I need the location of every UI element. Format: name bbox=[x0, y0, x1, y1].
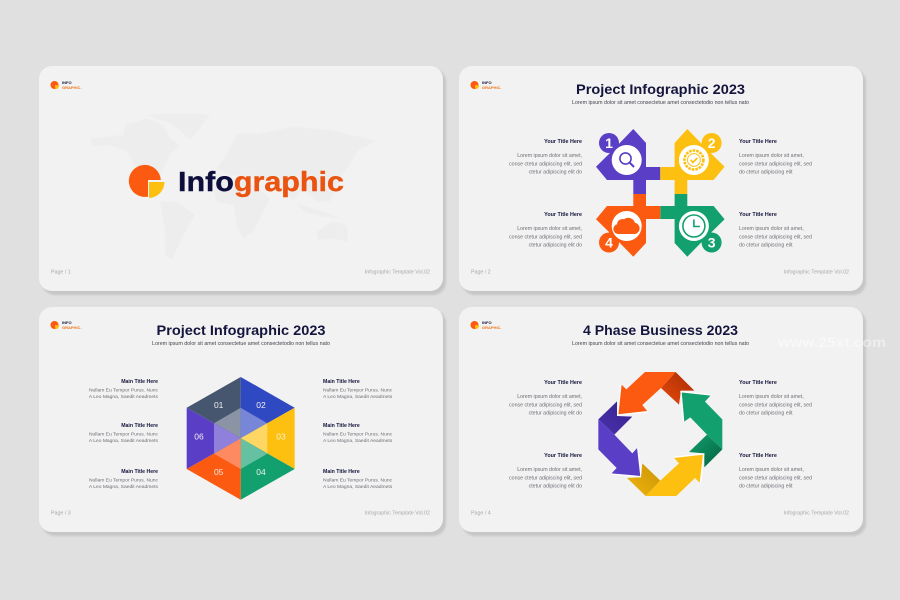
small logo: INFO bbox=[62, 80, 72, 85]
small logo: GRAPHIC. bbox=[482, 85, 502, 90]
text block: top left: conse ctetur adipiscing elit, sed bbox=[509, 402, 582, 408]
text block: left 2 bbox=[89, 423, 159, 444]
text block: bottom right: do ctetur adipiscing elit bbox=[739, 484, 793, 490]
text block: bottom left bbox=[509, 453, 582, 490]
arrow 3: green: 3 bbox=[708, 234, 716, 250]
subtitle: Lorem ipsum dolor sit amet consectetue amet consectetodio non tellus nato bbox=[572, 341, 749, 347]
text block: bottom left: ctetur adipiscing elit do bbox=[529, 242, 582, 248]
text block: bottom right: Lorem ipsum dolor sit amet, bbox=[739, 467, 804, 473]
footer page: Page / 3 bbox=[51, 510, 71, 516]
text block: right 1: Nullam Eu Tempor Purus. Nunc bbox=[323, 388, 393, 394]
segment 06: 06 bbox=[194, 432, 204, 442]
text block: left 1: A Leo Magna, Saedit Aeadmets bbox=[89, 394, 159, 400]
text block: bottom right: conse ctetur adipiscing elit, sed bbox=[739, 476, 812, 482]
text block: bottom right: Your Title Here bbox=[739, 453, 777, 459]
arrow 4: orange: 4 bbox=[605, 234, 613, 250]
arrow 4: orange bbox=[596, 194, 660, 257]
text block: top right: do ctetur adipiscing elit bbox=[739, 410, 793, 416]
text block: right 2 bbox=[323, 423, 393, 444]
text block: top right: Your Title Here bbox=[739, 139, 777, 145]
text block: right 2: A Leo Magna, Saedit Aeadmets bbox=[323, 438, 393, 444]
text block: bottom left: Your Title Here bbox=[544, 453, 582, 459]
arrow 1: purple bbox=[596, 129, 660, 194]
segment 05: 05 bbox=[214, 467, 224, 477]
footer template: Infographic Template Vol.02 bbox=[784, 510, 849, 516]
small logo bbox=[470, 80, 502, 90]
arrow: green bbox=[681, 392, 722, 467]
text block: left 3: A Leo Magna, Saedit Aeadmets bbox=[89, 484, 159, 490]
segment 04: 04 bbox=[256, 467, 266, 477]
text block: bottom left bbox=[509, 212, 582, 248]
icon: cloud bbox=[613, 218, 640, 234]
text block: right 3: A Leo Magna, Saedit Aeadmets bbox=[323, 484, 393, 490]
arrow 1: purple: 1 bbox=[605, 135, 613, 151]
text block: right 3 bbox=[323, 469, 393, 490]
text block: top right: Lorem ipsum dolor sit amet, bbox=[739, 153, 804, 159]
text block: top left: ctetur adipiscing elit do bbox=[529, 410, 582, 416]
segment 03: 03 bbox=[276, 432, 286, 442]
text block: right 1: Main Title Here bbox=[323, 379, 360, 385]
text block: left 2: Main Title Here bbox=[121, 423, 158, 429]
small logo: GRAPHIC. bbox=[62, 325, 82, 330]
text block: top right: Your Title Here bbox=[739, 380, 777, 386]
text block: left 3 bbox=[89, 469, 159, 490]
text block: right 1: A Leo Magna, Saedit Aeadmets bbox=[323, 394, 393, 400]
text block: top left bbox=[509, 380, 582, 416]
text block: top right: conse ctetur adipiscing elit, sed bbox=[739, 162, 812, 168]
arrow 2: yellow: 2 bbox=[708, 135, 716, 151]
segment 02: 02 bbox=[256, 400, 266, 410]
text block: bottom right: Lorem ipsum dolor sit amet, bbox=[739, 226, 804, 232]
text block: bottom left: conse ctetur adipiscing elit, sed bbox=[509, 234, 582, 240]
title: Project Infographic 2023 bbox=[576, 82, 745, 97]
text block: top left: Your Title Here bbox=[544, 139, 582, 145]
icon: magnifier bbox=[620, 153, 634, 167]
text block: bottom left: conse ctetur adipiscing elit, sed bbox=[509, 476, 582, 482]
text block: bottom left: Lorem ipsum dolor sit amet, bbox=[517, 226, 582, 232]
text block: top right: do ctetur adipiscing elit bbox=[739, 170, 793, 176]
small logo bbox=[470, 320, 502, 330]
panel: 4 phase business bbox=[459, 307, 866, 536]
text block: bottom right: do ctetur adipiscing elit bbox=[739, 242, 793, 248]
icon: check badge bbox=[684, 150, 703, 170]
small logo: GRAPHIC. bbox=[482, 325, 502, 330]
cycle arrows bbox=[598, 372, 722, 496]
segment 01: 01 bbox=[214, 400, 224, 410]
text block: bottom right: conse ctetur adipiscing elit, sed bbox=[739, 234, 812, 240]
panel: cover slide bbox=[39, 66, 446, 295]
small logo bbox=[50, 320, 82, 330]
small logo: INFO bbox=[482, 320, 492, 325]
text block: bottom right: Your Title Here bbox=[739, 212, 777, 218]
main logo mark bbox=[129, 165, 164, 198]
footer template: Infographic Template Vol.02 bbox=[784, 270, 849, 276]
arrow: purple bbox=[598, 401, 641, 477]
subtitle: Lorem ipsum dolor sit amet consectetue amet consectetodio non tellus nato bbox=[152, 341, 330, 347]
text block: right 3: Main Title Here bbox=[323, 469, 360, 475]
title: 4 Phase Business 2023 bbox=[583, 323, 738, 338]
text block: top left: Your Title Here bbox=[544, 380, 582, 386]
small logo: GRAPHIC. bbox=[62, 85, 82, 90]
arrow 2: yellow bbox=[660, 129, 725, 194]
text block: left 2: Nullam Eu Tempor Purus. Nunc bbox=[89, 432, 159, 438]
text block: top right bbox=[739, 139, 812, 176]
arrow: orange bbox=[618, 372, 694, 415]
text block: right 1 bbox=[323, 379, 393, 400]
text block: left 1 bbox=[89, 379, 159, 400]
text block: bottom left: Your Title Here bbox=[544, 212, 582, 218]
small logo: INFO bbox=[62, 320, 72, 325]
main heading: Infographic bbox=[178, 166, 344, 197]
text block: top right bbox=[739, 380, 812, 416]
text block: top left: conse ctetur adipiscing elit, sed bbox=[509, 162, 582, 168]
text block: left 3: Main Title Here bbox=[121, 469, 158, 475]
small logo bbox=[50, 80, 82, 90]
text block: top left: Lorem ipsum dolor sit amet, bbox=[517, 153, 582, 159]
text block: top right: Lorem ipsum dolor sit amet, bbox=[739, 394, 804, 400]
text block: top right: conse ctetur adipiscing elit, sed bbox=[739, 402, 812, 408]
arrow: yellow bbox=[627, 454, 704, 496]
text block: right 2: Main Title Here bbox=[323, 423, 360, 429]
world map background bbox=[90, 113, 377, 260]
text block: left 2: A Leo Magna, Saedit Aeadmets bbox=[89, 438, 159, 444]
text block: bottom left: Lorem ipsum dolor sit amet, bbox=[517, 467, 582, 473]
icon: clock bbox=[683, 215, 705, 237]
title: Project Infographic 2023 bbox=[156, 323, 326, 338]
footer template: Infographic Template Vol.02 bbox=[365, 510, 430, 516]
arrow 3: green bbox=[660, 194, 725, 257]
text block: right 3: Nullam Eu Tempor Purus. Nunc bbox=[323, 478, 393, 484]
watermark: www.25xt.com bbox=[777, 334, 886, 350]
text block: bottom left: ctetur adipiscing elit do bbox=[529, 484, 582, 490]
text block: left 3: Nullam Eu Tempor Purus. Nunc bbox=[89, 478, 159, 484]
text block: top left: ctetur adipiscing elit do bbox=[529, 170, 582, 176]
panel: project infographic with arrows bbox=[459, 66, 866, 295]
footer page: Page / 4 bbox=[471, 510, 491, 516]
text block: top left bbox=[509, 139, 582, 176]
text block: left 1: Main Title Here bbox=[121, 379, 158, 385]
text block: right 2: Nullam Eu Tempor Purus. Nunc bbox=[323, 432, 393, 438]
text block: top left: Lorem ipsum dolor sit amet, bbox=[517, 394, 582, 400]
subtitle: Lorem ipsum dolor sit amet consectetue amet consectetodio non tellus nato bbox=[572, 100, 749, 106]
hexagon chart bbox=[187, 377, 295, 500]
text block: left 1: Nullam Eu Tempor Purus. Nunc bbox=[89, 388, 159, 394]
footer page: Page / 2 bbox=[471, 270, 491, 276]
footer page: Page / 1 bbox=[51, 270, 71, 276]
footer template: Infographic Template Vol.02 bbox=[365, 270, 430, 276]
text block: bottom right bbox=[739, 453, 812, 490]
text block: bottom right bbox=[739, 212, 812, 248]
small logo: INFO bbox=[482, 80, 492, 85]
panel: hexagon infographic bbox=[39, 307, 446, 536]
